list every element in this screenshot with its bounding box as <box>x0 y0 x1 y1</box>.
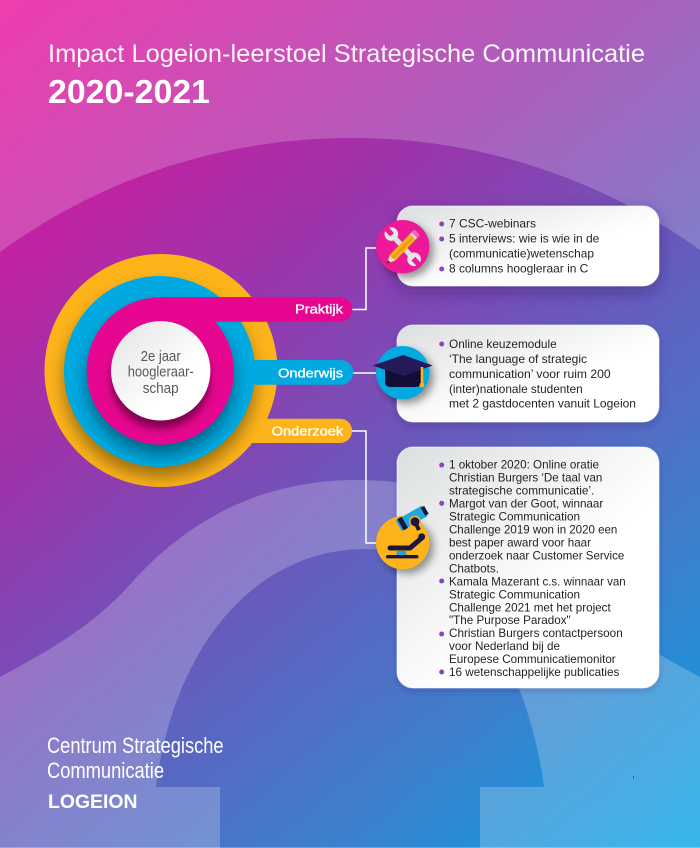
panel: Onderzoek: Strategic Communication <box>449 588 580 601</box>
footer: Centrum Strategische Communicatie <box>47 733 224 783</box>
logo: LOGEION: LOGEION <box>48 792 138 813</box>
orange ring with Onderzoek tab: Onderzoek <box>272 423 344 438</box>
panel: Onderzoek: best paper award voor haar <box>449 536 591 550</box>
panel: Onderzoek: Europese Communicatiemonitor <box>449 653 616 666</box>
orange ring with Onderzoek tab <box>44 254 352 487</box>
panel: Onderzoek: strategische communicatie’. <box>449 485 594 498</box>
panel: Onderzoek: Challenge 2021 met het project <box>449 601 611 614</box>
panel: Praktijk: 7 CSC-webinars <box>449 218 536 231</box>
panel: Praktijk: (communicatie)wetenschap <box>449 248 595 261</box>
centre circle: hoogleraar- <box>128 364 194 380</box>
panel: Onderwijs: met 2 gastdocenten vanuit Logeion <box>449 398 636 411</box>
panel: Onderwijs <box>397 325 659 426</box>
centre circle: schap <box>143 380 179 397</box>
panel: Onderwijs: (inter)nationale studenten <box>449 383 583 396</box>
footer: Centrum Strategische Communicatie: Centrum Strategische <box>47 733 224 758</box>
panel: Onderzoek: voor Nederland bij de <box>449 640 560 653</box>
panel: Onderwijs: ‘The language of strategic <box>449 353 587 366</box>
panel: Praktijk: 8 columns hoogleraar in C <box>449 263 588 276</box>
panel: Onderzoek: Christian Burgers contactpersoon <box>449 627 623 640</box>
panel: Onderzoek: 16 wetenschappelijke publicaties <box>449 666 619 679</box>
panel: Onderzoek: Margot van der Goot, winnaar <box>449 498 603 511</box>
title: Impact Logeion-leerstoel Strategische Communicatie <box>48 40 645 68</box>
panel: Onderzoek: Christian Burgers ‘De taal van <box>449 472 602 485</box>
year heading: 2020-2021 <box>48 73 210 110</box>
icon: graduation cap <box>373 346 434 404</box>
panel: Onderwijs: Online keuzemodule <box>449 338 557 351</box>
blue ring with Onderwijs tab <box>64 276 353 467</box>
panel: Onderzoek <box>397 447 659 691</box>
panel: Onderzoek: 1 oktober 2020: Online oratie <box>449 459 599 472</box>
panel: Onderzoek: onderzoek naar Customer Service <box>449 549 624 562</box>
centre circle: 2e jaar <box>141 348 181 365</box>
background: light lower arch shape <box>0 480 700 848</box>
pink ring with Praktijk tab <box>87 297 352 445</box>
blue ring with Onderwijs tab: Onderwijs <box>278 365 344 380</box>
panel: Praktijk <box>397 206 659 292</box>
panel: Onderzoek: Chatbots. <box>449 562 499 575</box>
connector: Praktijk <box>350 248 380 310</box>
panel: Onderzoek: "The Purpose Paradox" <box>449 614 571 627</box>
connector: Onderzoek <box>350 431 380 543</box>
panel: Onderzoek: Strategic Communication <box>449 510 580 524</box>
panel: Onderwijs: communication’ voor ruim 200 <box>449 368 611 381</box>
footer: Centrum Strategische Communicatie: Communicatie <box>47 758 164 783</box>
concentric circle diagram <box>44 254 353 487</box>
panel: Praktijk: 5 interviews: wie is wie in de <box>449 233 599 246</box>
connector: Onderwijs <box>350 372 380 374</box>
background: light top band above arch <box>0 0 700 252</box>
icon: wrench and pencil <box>376 220 434 278</box>
panel: Onderzoek: Challenge 2019 won in 2020 een <box>449 524 617 536</box>
panel: Onderzoek: Kamala Mazerant c.s. winnaar van <box>449 575 626 588</box>
icon: microscope <box>376 504 434 574</box>
centre circle <box>111 321 210 420</box>
pink ring with Praktijk tab: Praktijk <box>295 301 344 316</box>
